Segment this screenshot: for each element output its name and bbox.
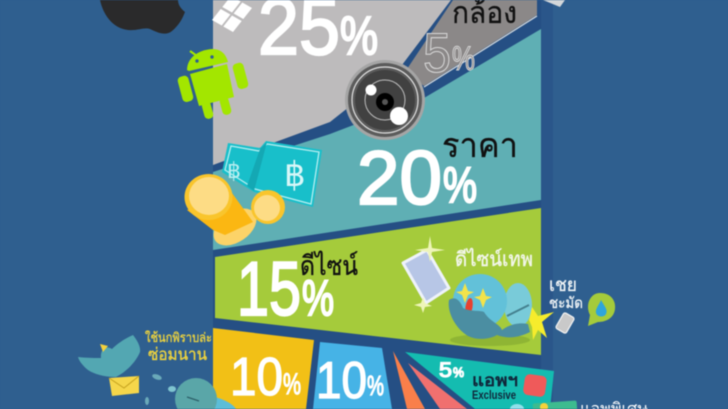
panel: blue 10% [313,342,392,409]
label: pigeon post: ใช้นกพิราบล่ะ [145,330,212,345]
character: amazed [449,274,532,346]
icon: gold coins [184,174,285,253]
panel: design 15% [215,208,554,355]
column right stripe [541,0,553,409]
value: 10%: 10 [230,347,283,407]
value: 10%: % [367,370,384,401]
value: 20%: % [443,157,477,213]
label: divine design: ดีไซน์เทพ [455,248,533,271]
panel: exclusive apps 5% [405,352,577,409]
panel: battery 10% [213,328,314,409]
value: 10%: 10 [316,352,367,409]
panel: orange wedge [393,351,425,409]
panel: pink wedge [408,363,467,409]
icon: app card [510,400,577,409]
icon: apple logo [100,0,185,34]
icon: baht banknotes [222,141,322,207]
icon: windows logo [212,0,252,32]
character: sad [145,373,236,409]
label: pigeon post [145,330,212,364]
icon: pigeon with envelope [78,335,140,396]
value: 5%: 5 [423,21,451,84]
panel: price 20% [184,29,541,253]
label: pigeon post: ซ่อมนาน [148,345,207,364]
icon: baht banknotes: ฿ [284,156,306,194]
value: 5% [439,359,464,382]
icon: tablet [403,236,449,313]
value: 10%: % [283,368,301,401]
icon: camera lens [345,60,425,140]
icon: red app [523,374,547,397]
value: 5%: % [453,364,464,380]
label: exclusive: Exclusive [472,388,516,402]
icon: phone [555,312,575,334]
heading: price: ราคา [442,127,518,165]
label: so lame [549,275,583,312]
heading: design: ดีไซน์ [300,250,358,281]
panel: camera 5% [405,0,537,87]
heading: apps: แอพฯ [472,371,518,390]
label: so lame: เชย [549,275,577,296]
icon: star burst [529,307,554,340]
value: 15%: 15 [237,247,301,332]
panel: operating system 25% [212,0,451,165]
value: 25%: % [340,6,378,66]
value: 15%: % [302,270,334,326]
value: 20%: 20 [357,136,442,221]
value: 5% [423,21,475,84]
icon: android robot [177,49,249,120]
icon: speech bubble with drop [588,293,615,326]
icon: baht banknotes: ฿ [227,158,241,183]
column backing band [213,0,541,409]
icon: white corner shape [543,0,565,7]
value: 5%: 5 [439,359,452,382]
value: 5%: % [452,40,475,78]
label: so lame: ชะมัด [549,295,583,312]
